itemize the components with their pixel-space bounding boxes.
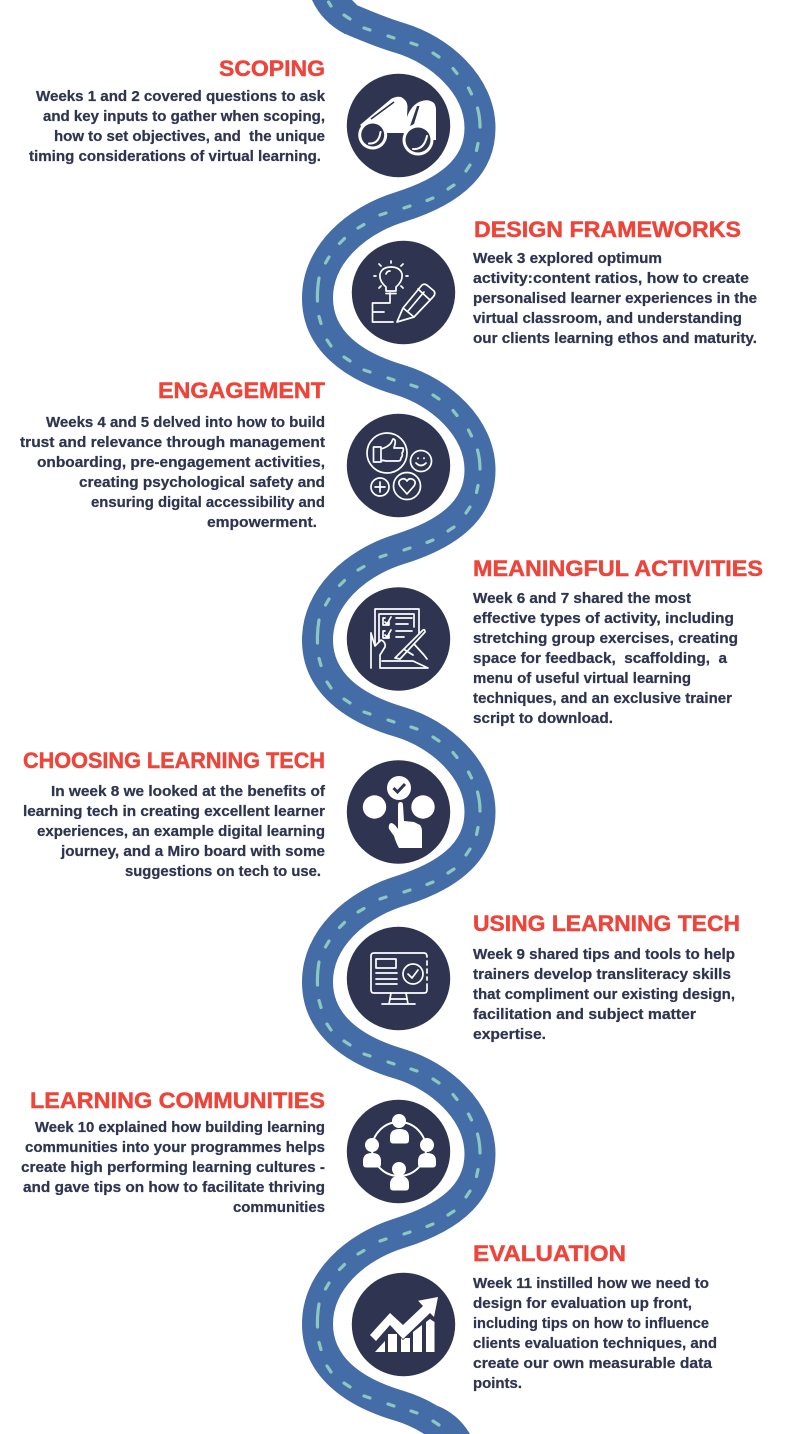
text block: engagement: trust and relevance through management: [20, 434, 325, 451]
panel: choosing learning tech: [23, 748, 326, 880]
text block: design frameworks: personalised learner experiences in the: [473, 290, 757, 307]
panel: learning communities: [21, 1088, 325, 1216]
text block: meaningful activities: stretching group exercises, creating: [473, 630, 738, 647]
text block: engagement: ensuring digital accessibility and: [91, 494, 325, 511]
heading: using learning tech: USING LEARNING TECH: [473, 911, 740, 936]
text block: design frameworks: [473, 250, 757, 347]
text block: scoping: how to set objectives, and the unique: [54, 128, 325, 145]
panel: scoping: [29, 56, 326, 165]
text block: learning communities: communities: [233, 1199, 325, 1216]
heading: learning communities: LEARNING COMMUNITIES: [30, 1088, 325, 1113]
icon: rising chart arrow: [352, 1273, 455, 1376]
text block: design frameworks: our clients learning ethos and maturity.: [473, 330, 757, 347]
text block: choosing learning tech: journey, and a Miro board with some: [60, 843, 325, 860]
text block: evaluation: create our own measurable data: [473, 1355, 713, 1372]
text block: design frameworks: activity:content ratios, how to create: [473, 270, 749, 287]
text block: meaningful activities: [473, 590, 738, 727]
heading: design frameworks: DESIGN FRAMEWORKS: [474, 217, 741, 242]
text block: using learning tech: Week 9 shared tips and tools to help: [473, 946, 735, 963]
text block: learning communities: communities into your programmes helps: [25, 1139, 325, 1156]
text block: engagement: empowerment.: [207, 514, 317, 531]
text block: evaluation: including tips on how to influence: [473, 1315, 709, 1332]
text block: engagement: Weeks 4 and 5 delved into how to build: [46, 414, 325, 431]
text block: meaningful activities: script to download.: [473, 710, 613, 727]
text block: engagement: creating psychological safety and: [79, 474, 325, 491]
text block: evaluation: Week 11 instilled how we need to: [473, 1275, 709, 1292]
text block: scoping: timing considerations of virtual learning.: [29, 148, 321, 165]
text block: engagement: onboarding, pre-engagement activities,: [37, 454, 325, 471]
panel: engagement: [20, 378, 325, 531]
text block: using learning tech: [473, 946, 735, 1043]
icon: community circle: [347, 1100, 450, 1203]
heading: meaningful activities: MEANINGFUL ACTIVITIES: [473, 556, 763, 581]
winding road: [312, 0, 480, 1434]
heading: choosing learning tech: CHOOSING LEARNING TECH: [23, 748, 325, 773]
text block: learning communities: create high performing learning cultures -: [21, 1159, 325, 1176]
icon: lightbulb and pencil: [352, 241, 455, 344]
text block: scoping: Weeks 1 and 2 covered questions to ask: [36, 88, 326, 105]
heading: scoping: SCOPING: [219, 56, 325, 81]
panel: meaningful activities: [473, 556, 763, 727]
text block: evaluation: [473, 1275, 717, 1392]
panel: design frameworks: [473, 217, 757, 347]
icon: checklist and writing hand: [347, 587, 450, 691]
panel: using learning tech: [473, 911, 740, 1043]
text block: engagement: [20, 414, 325, 531]
panel: evaluation: [473, 1241, 717, 1392]
text block: design frameworks: virtual classroom, and understanding: [473, 310, 742, 327]
text block: using learning tech: trainers develop transliteracy skills: [473, 966, 731, 983]
text block: using learning tech: expertise.: [473, 1026, 546, 1043]
text block: meaningful activities: Week 6 and 7 shared the most: [473, 590, 691, 607]
heading: evaluation: EVALUATION: [473, 1241, 626, 1266]
text block: design frameworks: Week 3 explored optimum: [473, 250, 662, 267]
heading: engagement: ENGAGEMENT: [158, 378, 325, 403]
text block: evaluation: points.: [473, 1375, 522, 1392]
text block: choosing learning tech: experiences, an example digital learning: [37, 823, 325, 840]
text block: meaningful activities: menu of useful virtual learning: [473, 670, 691, 687]
text block: choosing learning tech: In week 8 we looked at the benefits of: [51, 783, 326, 800]
icon: monitor with check: [347, 927, 450, 1030]
text block: learning communities: [21, 1119, 325, 1216]
text block: choosing learning tech: learning tech in creating excellent learner: [23, 803, 325, 820]
text block: learning communities: and gave tips on how to facilitate thriving: [23, 1179, 325, 1196]
text block: meaningful activities: techniques, and an exclusive trainer: [473, 690, 732, 707]
text block: using learning tech: facilitation and subject matter: [473, 1006, 696, 1023]
text block: meaningful activities: space for feedback, scaffolding, a: [473, 650, 728, 667]
icon: binoculars: [347, 74, 450, 177]
text block: evaluation: clients evaluation techniques, and: [473, 1335, 717, 1352]
text block: learning communities: Week 10 explained how building learning: [35, 1119, 325, 1136]
text block: scoping: [29, 88, 326, 165]
text block: evaluation: design for evaluation up front,: [473, 1295, 692, 1312]
text block: using learning tech: that compliment our existing design,: [473, 986, 735, 1003]
text block: choosing learning tech: suggestions on tech to use.: [125, 863, 321, 880]
text block: meaningful activities: effective types of activity, including: [473, 610, 734, 627]
text block: scoping: and key inputs to gather when scoping,: [43, 108, 325, 125]
text block: choosing learning tech: [23, 783, 326, 880]
icon: hand selecting option: [347, 760, 450, 864]
icon: thumbs up, smile, plus, heart: [347, 414, 450, 517]
